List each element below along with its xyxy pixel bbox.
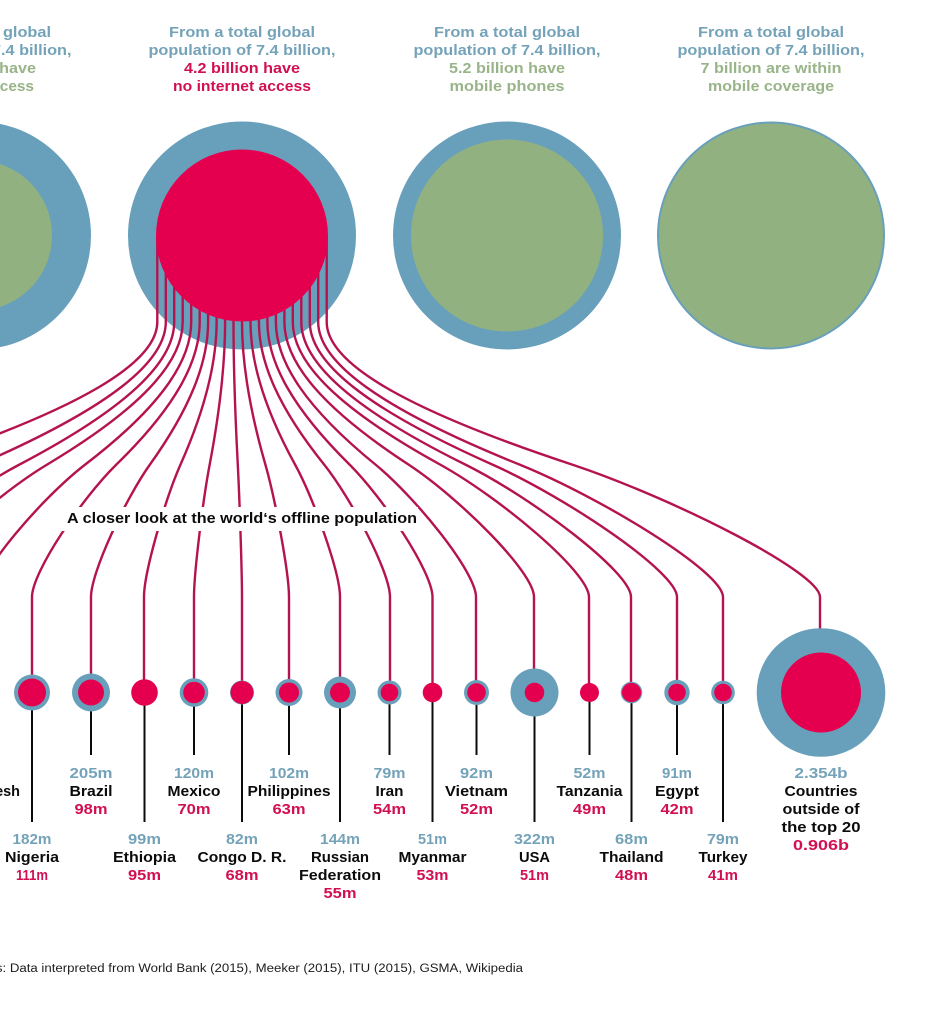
heading: no internet access: 4.2 billion have bbox=[184, 61, 300, 77]
country: Nigeria: 182m bbox=[12, 832, 52, 848]
connector lines from offline circle to countries bbox=[0, 236, 820, 692]
country: Myanmar: Myanmar bbox=[398, 850, 467, 866]
country: Congo D. R.: 68m bbox=[226, 868, 258, 884]
section heading: closer look: A closer look at the world‘s offline population bbox=[67, 511, 417, 527]
country: Vietnam bbox=[445, 680, 508, 818]
heading: mobile phones: 5.2 billion have bbox=[449, 61, 565, 77]
country: Congo D. R.: 82m bbox=[226, 832, 258, 848]
country: Tanzania: 49m bbox=[573, 802, 606, 818]
country: Mexico bbox=[168, 678, 221, 818]
country: Iran: 79m bbox=[374, 766, 406, 782]
country: Vietnam: 92m bbox=[460, 766, 493, 782]
country: Brazil: Brazil bbox=[70, 784, 112, 800]
country: USA: 322m bbox=[514, 832, 555, 848]
panel: mobile coverage bbox=[657, 25, 885, 350]
country: USA: 51m bbox=[520, 868, 549, 884]
group: countries outside of the top 20 bbox=[757, 628, 885, 854]
country: Iran: Iran bbox=[376, 784, 404, 800]
country: USA: USA bbox=[519, 850, 551, 866]
country: Vietnam: 52m bbox=[460, 802, 493, 818]
country: Russian Federation: 144m bbox=[320, 832, 360, 848]
country: Tanzania: Tanzania bbox=[556, 784, 624, 800]
country: Ethiopia: 99m bbox=[128, 832, 161, 848]
country: Congo D. R.: Congo D. R. bbox=[198, 850, 286, 866]
heading: no internet access: no internet access bbox=[173, 79, 311, 95]
group: countries outside of the top 20: 0.906b bbox=[793, 838, 849, 854]
heading: mobile coverage: mobile coverage bbox=[708, 79, 834, 95]
country: Mexico: 70m bbox=[178, 802, 210, 818]
heading: mobile coverage bbox=[678, 25, 864, 95]
heading: mobile phones bbox=[414, 25, 600, 95]
country: Philippines: 63m bbox=[272, 802, 306, 818]
panel: internet access bbox=[0, 25, 91, 350]
country: Myanmar bbox=[398, 683, 467, 884]
country: Nigeria bbox=[5, 674, 60, 884]
country: Russian Federation: 55m bbox=[324, 886, 356, 902]
heading: no internet access: population of 7.4 billion, bbox=[148, 43, 336, 59]
country: Turkey: Turkey bbox=[698, 850, 748, 866]
country: Tanzania: 52m bbox=[574, 766, 606, 782]
country: Iran: 54m bbox=[373, 802, 406, 818]
panel: no internet access bbox=[128, 25, 356, 350]
country: Thailand: 68m bbox=[615, 832, 648, 848]
country: Tanzania bbox=[556, 683, 624, 818]
circle: total population behind offline share bbox=[128, 122, 356, 350]
circle: mobile coverage bbox=[657, 122, 885, 350]
country: Philippines: Philippines bbox=[248, 784, 330, 800]
country: Turkey: 41m bbox=[708, 868, 738, 884]
country: Brazil bbox=[70, 674, 112, 818]
section heading: closer look bbox=[62, 507, 418, 531]
heading: mobile phones: population of 7.4 billion, bbox=[414, 43, 600, 59]
heading: mobile phones: From a total global bbox=[434, 25, 580, 41]
country: Thailand: Thailand bbox=[600, 850, 664, 866]
circle: offline population bbox=[156, 150, 328, 322]
country: Egypt: 42m bbox=[660, 802, 694, 818]
country: Mexico: 120m bbox=[174, 766, 214, 782]
country: Nigeria: Nigeria bbox=[5, 850, 60, 866]
panel: mobile phones bbox=[393, 25, 621, 350]
country: Congo D. R. bbox=[198, 680, 286, 884]
country: Mexico: Mexico bbox=[168, 784, 221, 800]
country: Iran bbox=[373, 680, 406, 818]
country: Egypt: Egypt bbox=[655, 784, 699, 800]
heading: no internet access bbox=[148, 25, 336, 95]
country: Philippines: 102m bbox=[269, 766, 309, 782]
country: Ethiopia bbox=[113, 679, 177, 884]
heading: mobile coverage: population of 7.4 billion, bbox=[678, 43, 864, 59]
heading: no internet access: From a total global bbox=[169, 25, 315, 41]
country: Turkey: 79m bbox=[707, 832, 739, 848]
country: Myanmar: 53m bbox=[416, 868, 448, 884]
country: Russian Federation bbox=[299, 676, 381, 902]
country: Thailand: 48m bbox=[615, 868, 648, 884]
country: Philippines bbox=[248, 679, 330, 818]
country: Brazil: 205m bbox=[70, 766, 112, 782]
heading: mobile phones: mobile phones bbox=[450, 79, 564, 95]
heading: mobile coverage: 7 billion are within bbox=[700, 61, 842, 77]
group: countries outside of the top 20: 2.354b bbox=[794, 766, 848, 782]
circle: internet access bbox=[0, 122, 91, 350]
country: Egypt: 91m bbox=[662, 766, 692, 782]
country: Thailand bbox=[600, 682, 664, 884]
country: Nigeria: 111m bbox=[16, 868, 48, 884]
heading: mobile coverage: From a total global bbox=[698, 25, 844, 41]
country: Russian Federation: Russian bbox=[311, 850, 369, 866]
heading: internet access bbox=[0, 25, 72, 95]
country: Turkey bbox=[698, 681, 748, 884]
country: Brazil: 98m bbox=[74, 802, 108, 818]
group: countries outside of the top 20: Countries bbox=[784, 784, 858, 800]
country: Russian Federation: Federation bbox=[299, 868, 381, 884]
group: countries outside of the top 20: the top 20 bbox=[782, 820, 860, 836]
country: Ethiopia: 95m bbox=[128, 868, 161, 884]
country: Ethiopia: Ethiopia bbox=[113, 850, 177, 866]
country: Myanmar: 51m bbox=[418, 832, 447, 848]
country: USA bbox=[510, 668, 558, 884]
country: Vietnam: Vietnam bbox=[445, 784, 508, 800]
circle: mobile phones bbox=[393, 122, 621, 350]
group: countries outside of the top 20: outside of bbox=[782, 802, 860, 818]
country: Egypt bbox=[655, 680, 699, 818]
